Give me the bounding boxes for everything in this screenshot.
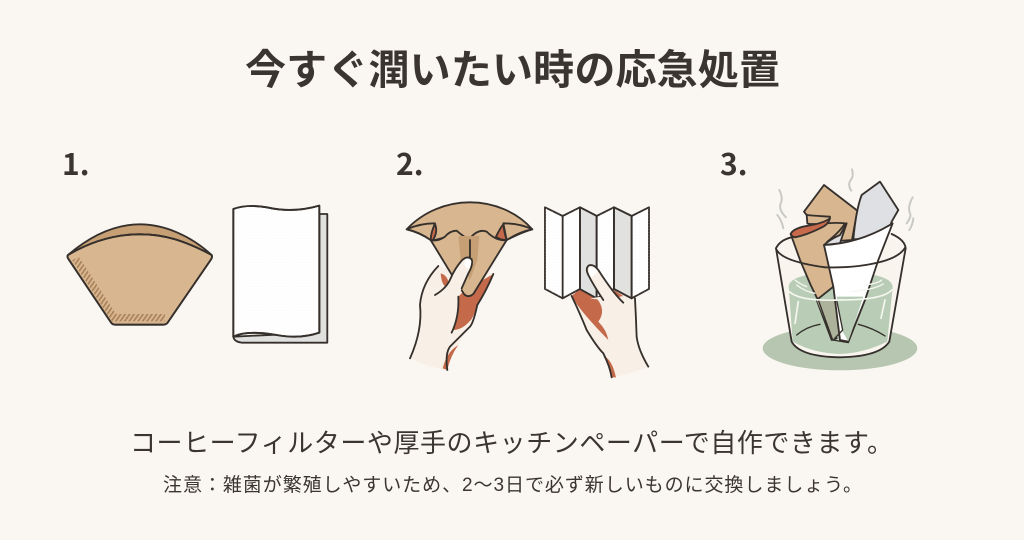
icon: hand holding folded filter (407, 202, 532, 370)
icon: green saucer (763, 326, 917, 370)
step 1 illustrations (67, 206, 327, 343)
step number 1: 1. (62, 140, 89, 184)
icon: glass with filter and paper in water (776, 182, 906, 357)
caution note: 注意：雑菌が繁殖しやすいため、2〜3日で必ず新しいものに交換しましょう。 (163, 474, 862, 496)
step 3 illustration (763, 169, 917, 370)
icon: steam lines (777, 169, 913, 230)
icon: coffee filter (67, 224, 212, 325)
subtitle: コーヒーフィルターや厚手のキッチンペーパーで自作できます。 (130, 428, 893, 458)
step number 3: 3. (720, 140, 747, 184)
step 2 illustrations (407, 202, 649, 377)
icon: kitchen paper sheet (233, 206, 327, 343)
icon: hand holding pleated paper (545, 207, 649, 377)
step number 2: 2. (396, 140, 423, 184)
title: 今すぐ潤いたい時の応急処置 (245, 47, 780, 93)
